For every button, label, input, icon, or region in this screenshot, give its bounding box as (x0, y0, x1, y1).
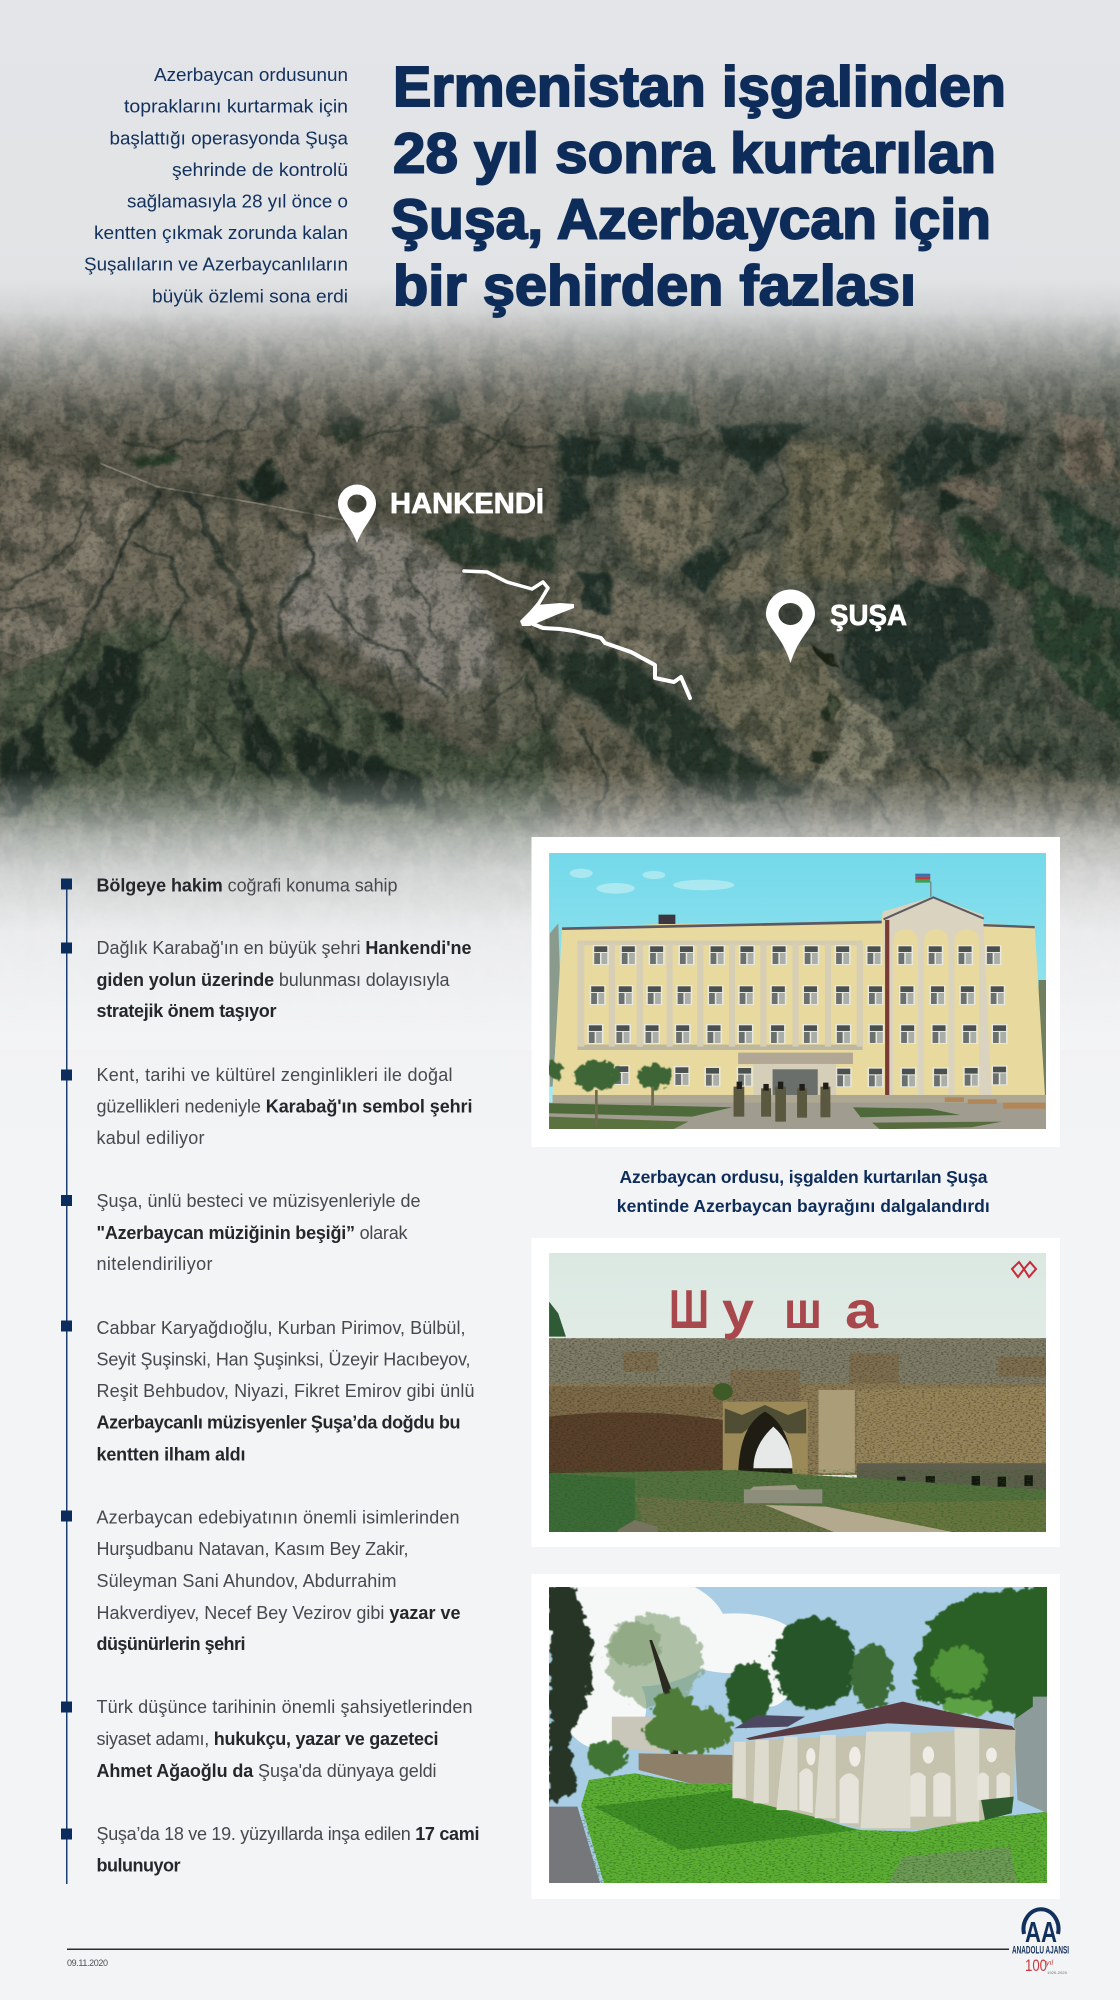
pin: Hankendi (338, 484, 376, 543)
fade at bottom of map (0, 770, 1120, 1050)
pin: Şuşa (766, 590, 815, 663)
intro text: topraklarını kurtarmak için (124, 96, 348, 117)
terrain west of the road (0, 387, 559, 823)
photo frame: building with flag (532, 837, 1060, 1147)
photo frame: historic mosque building (532, 1573, 1060, 1899)
item 5: Seyit Şuşinski, Han Şuşinksi, Üzeyir Hacıbeyov, (96, 1350, 470, 1370)
intro text (84, 64, 349, 306)
photo: stone building among trees (543, 1573, 1052, 1884)
photo caption (617, 1167, 990, 1216)
terrain east of the road (548, 378, 1120, 837)
item 4: Şuşa, ünlü besteci ve müzisyenleriyle de (96, 1191, 420, 1211)
logo: Anadolu Ajansı (1012, 1909, 1069, 1975)
item 6: Hurşudbanu Natavan, Kasım Bey Zakir, (96, 1539, 408, 1559)
item 8: Şuşa’da 18 ve 19. yüzyıllarda inşa edilen 17 cami (96, 1824, 480, 1844)
logo: Anadolu Ajansı: yıl (1045, 1960, 1053, 1967)
valley road and settlements (100, 463, 343, 520)
item 2: stratejik önem taşıyor (96, 1001, 276, 1021)
item 3 (61, 1065, 472, 1148)
sign letters on wall: а (845, 1282, 879, 1340)
logo: Anadolu Ajansı: 1920-2020 (1047, 1970, 1068, 1975)
intro text: kentten çıkmak zorunda kalan (94, 222, 348, 243)
title: 28 yıl sonra kurtarılan (393, 122, 996, 186)
item 7 (61, 1697, 472, 1781)
red emblem (1012, 1262, 1036, 1277)
sign letters on wall: Ш (669, 1278, 709, 1340)
sign letters on wall (672, 1290, 878, 1339)
item 1: Bölgeye hakim coğrafi konuma sahip (96, 875, 398, 895)
sign letters on wall: у (722, 1282, 754, 1340)
intro text: şehrinde de kontrolü (172, 159, 348, 180)
item 4 (61, 1191, 420, 1274)
title: Ermenistan işgalinden (393, 55, 1006, 119)
intro text: Şuşalıların ve Azerbaycanlıların (84, 254, 348, 275)
item 7: Ahmet Ağaoğlu da Şuşa'da dünyaya geldi (96, 1761, 436, 1781)
logo: Anadolu Ajansı: ANADOLU AJANSI (1012, 1944, 1069, 1956)
bullet list (61, 875, 480, 1876)
sign letters on wall: ш (784, 1282, 822, 1340)
item 2: giden yolun üzerinde bulunması dolayısıyla (96, 970, 450, 990)
photo: fortress wall and gate (549, 1253, 1047, 1533)
date: 09.11.2020 (67, 1958, 108, 1968)
item 4: nitelendiriliyor (96, 1254, 212, 1274)
item 4: "Azerbaycan müziğinin beşiği” olarak (96, 1223, 408, 1243)
item 2: Dağlık Karabağ'ın en büyük şehri Hankendi'ne (96, 938, 472, 958)
intro text: sağlamasıyla 28 yıl önce o (127, 190, 348, 212)
item 8 (61, 1824, 480, 1876)
item 5 (61, 1318, 474, 1464)
label: Şuşa: ŞUŞA (830, 600, 907, 632)
intro text: büyük özlemi sona erdi (152, 285, 348, 306)
satellite map (0, 293, 1120, 929)
intro text: başlattığı operasyonda Şuşa (110, 127, 349, 148)
item 2 (61, 938, 472, 1021)
logo: Anadolu Ajansı: AA (1025, 1917, 1057, 1949)
label: Hankendi: HANKENDİ (390, 488, 544, 520)
item 7: siyaset adamı, hukukçu, yazar ve gazeteci (96, 1729, 438, 1749)
photo caption: Azerbaycan ordusu, işgalden kurtarılan Şuşa (620, 1167, 988, 1187)
item 6: düşünürlerin şehri (96, 1634, 246, 1654)
footer rule (67, 1948, 1009, 1950)
item 6: Azerbaycan edebiyatının önemli isimlerinden (96, 1508, 460, 1528)
item 7: Türk düşünce tarihinin önemli şahsiyetlerinden (96, 1697, 472, 1717)
photo caption: kentinde Azerbaycan bayrağını dalgalandırdı (617, 1196, 990, 1216)
item 6: Süleyman Sani Ahundov, Abdurrahim (96, 1571, 396, 1591)
item 6: Hakverdiyev, Necef Bey Vezirov gibi yazar ve (96, 1603, 460, 1623)
intro text: Azerbaycan ordusunun (154, 64, 348, 85)
item 8: bulunuyor (96, 1856, 180, 1876)
photo frame: Şuşa fortress gate (532, 1238, 1060, 1547)
logo: Anadolu Ajansı: 100 (1025, 1956, 1047, 1975)
item 6 (61, 1508, 460, 1654)
item 3: Kent, tarihi ve kültürel zenginlikleri ile doğal (96, 1065, 452, 1085)
photo: government building with soldiers (549, 853, 1047, 1129)
item 5: Azerbaycanlı müzisyenler Şuşa’da doğdu bu (96, 1413, 460, 1433)
title: bir şehirden fazlası (393, 254, 916, 318)
title (391, 55, 1006, 318)
road between Hankendi and Şuşa (464, 571, 690, 698)
item 5: Cabbar Karyağdıoğlu, Kurban Pirimov, Bülbül, (96, 1318, 466, 1338)
terrain texture (0, 324, 1120, 852)
item 5: Reşit Behbudov, Niyazi, Fikret Emirov gibi ünlü (96, 1381, 474, 1401)
item 3: güzellikleri nedeniyle Karabağ'ın sembol şehri (96, 1096, 472, 1116)
timeline line (66, 884, 68, 1884)
fade at top of map (0, 280, 1120, 431)
item 3: kabul ediliyor (96, 1128, 204, 1148)
title: Şuşa, Azerbaycan için (391, 188, 991, 252)
item 5: kentten ilham aldı (96, 1444, 246, 1464)
